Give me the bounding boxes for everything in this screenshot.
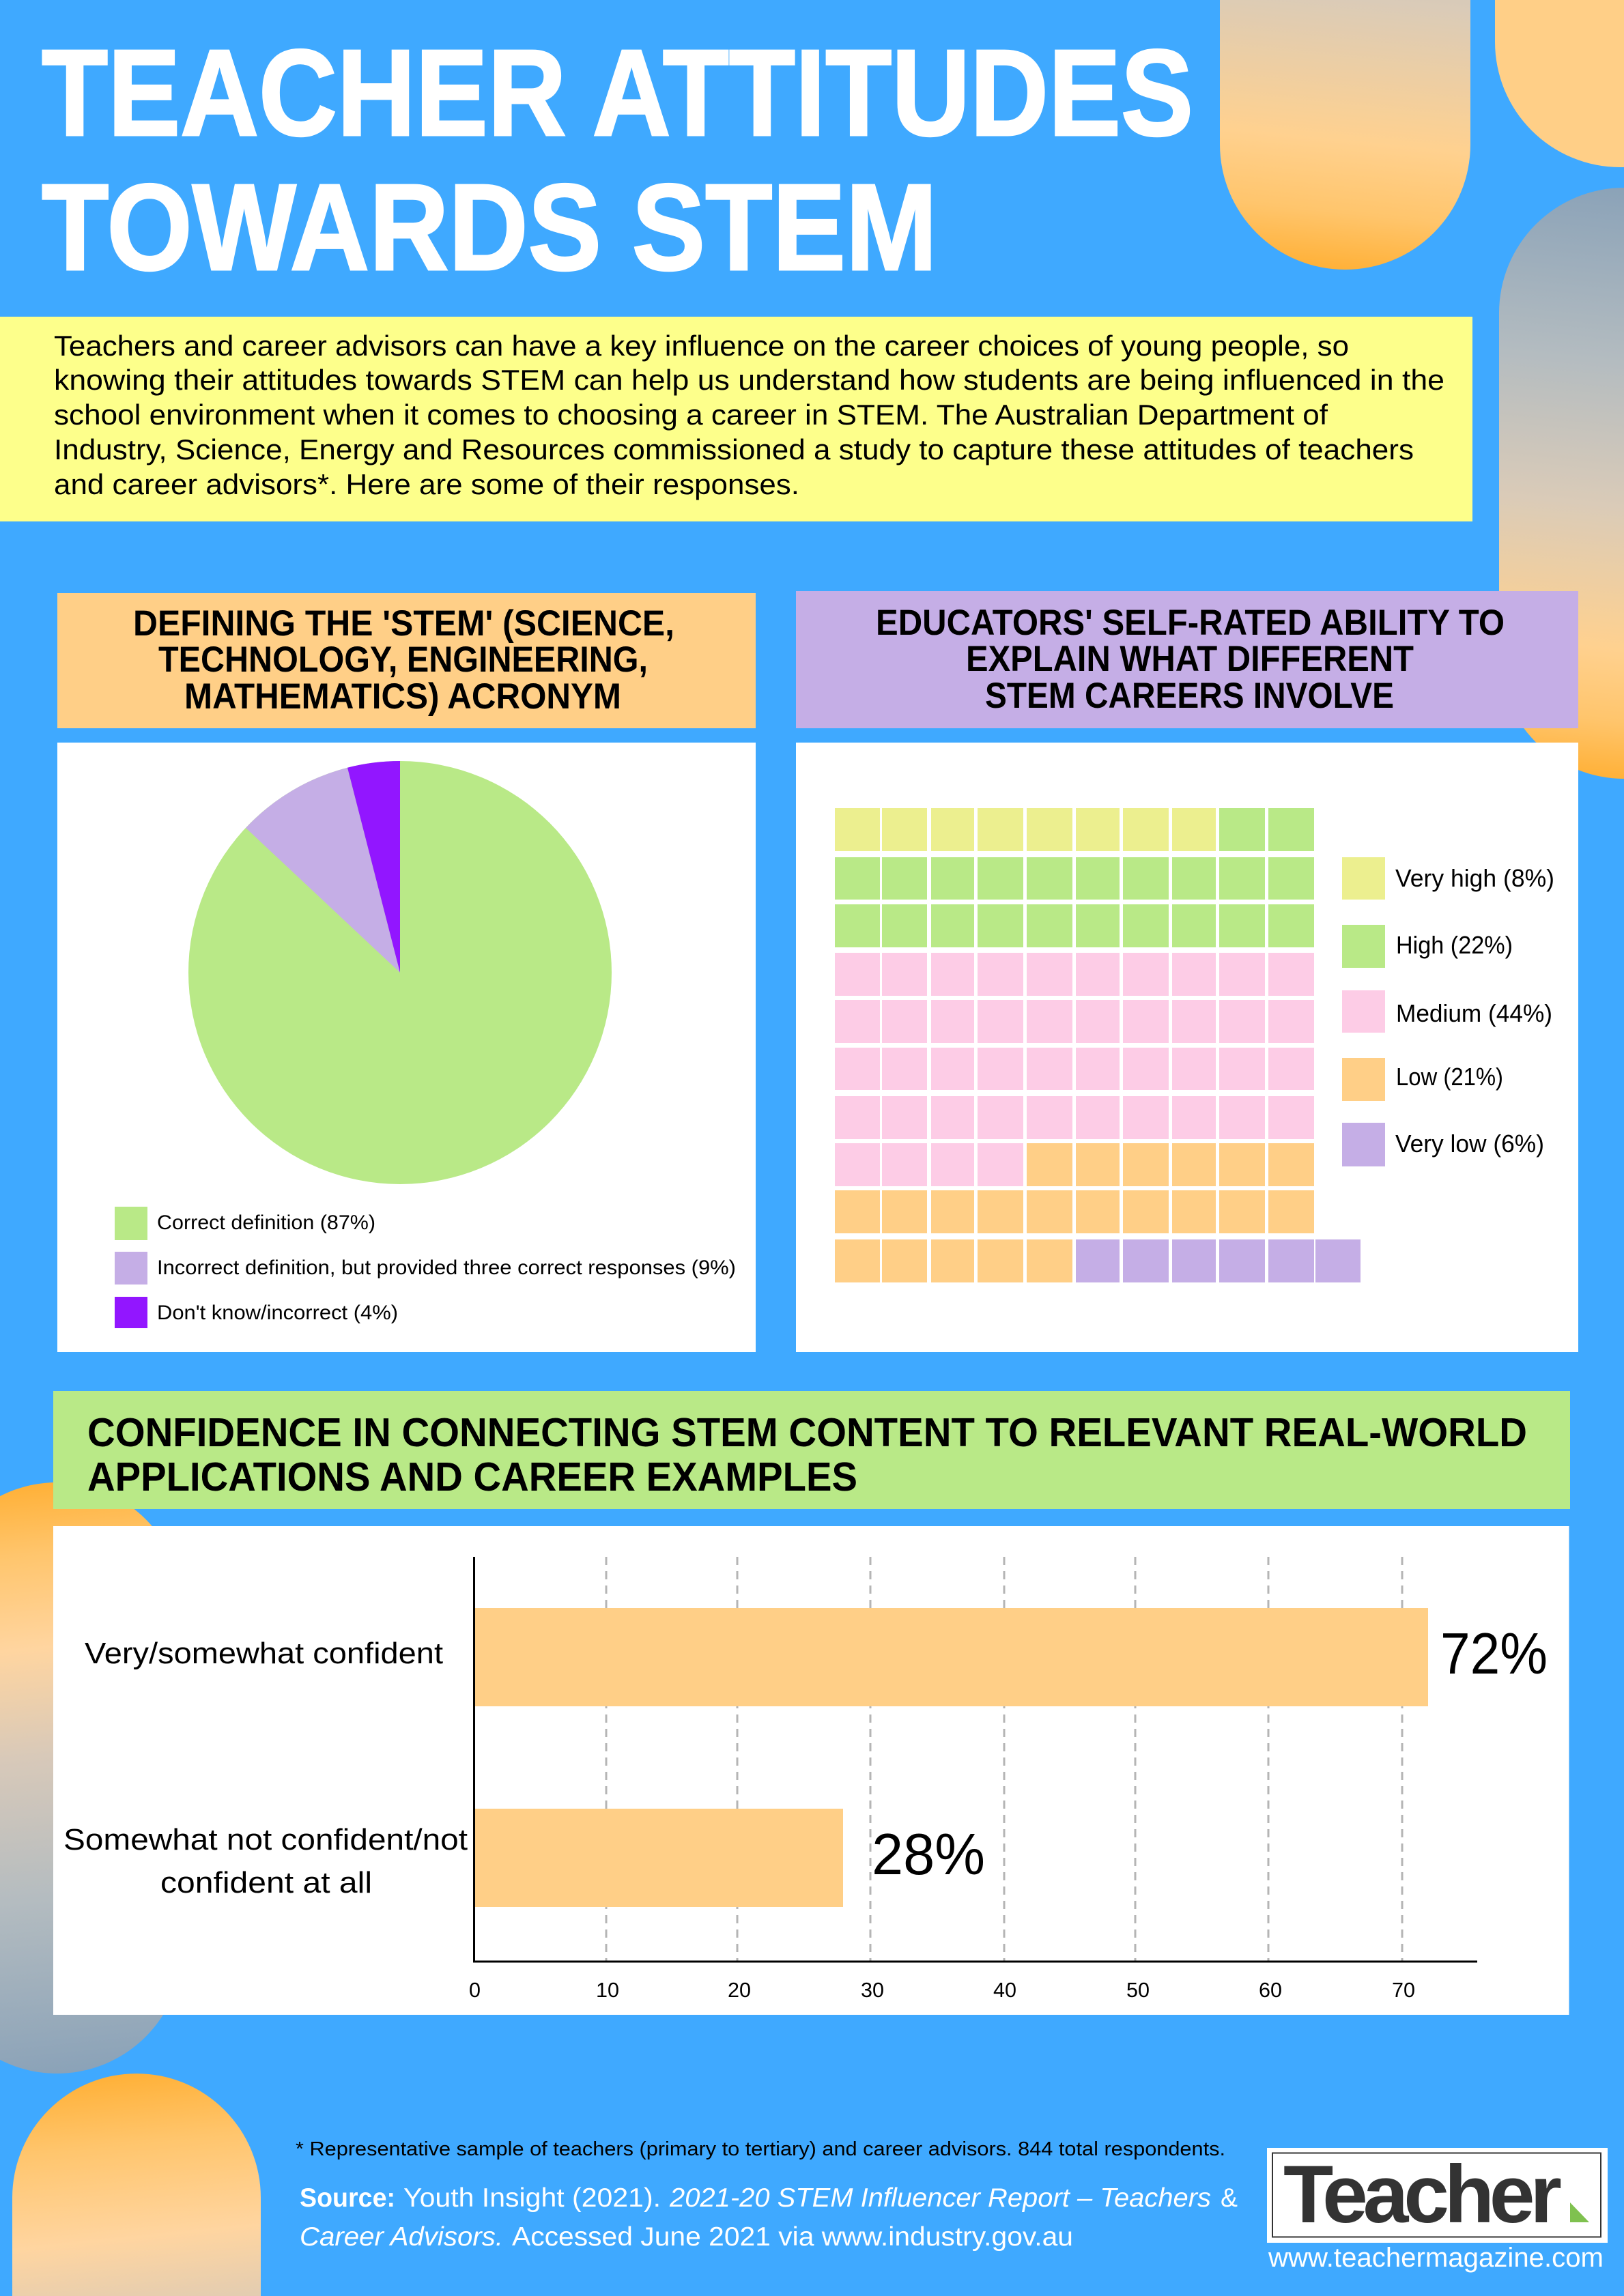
pie legend bbox=[115, 1207, 736, 1328]
axis tick labels: 50 bbox=[1126, 1978, 1150, 2002]
source citation: 2021-20 STEM Influencer Report – Teachers bbox=[669, 2183, 1211, 2213]
category labels: confident at all bbox=[160, 1866, 372, 1899]
grid lines bbox=[606, 1557, 1402, 1961]
decorative capsule top centre bbox=[1220, 0, 1470, 270]
decorative capsule left bbox=[0, 1482, 182, 2073]
intro text bbox=[54, 330, 1444, 500]
intro text: Teachers and career advisors can have a key influence on the career choices of young people, so bbox=[54, 330, 1349, 362]
category labels bbox=[63, 1637, 468, 1899]
axis tick labels: 40 bbox=[993, 1978, 1016, 2002]
axis tick labels: 20 bbox=[728, 1978, 751, 2002]
source citation: & bbox=[1221, 2183, 1238, 2213]
footnote: * Representative sample of teachers (primary to tertiary) and career advisors. 844 total respondents. bbox=[296, 2138, 1225, 2160]
panel: self-rated ability heading: STEM CAREERS INVOLVE bbox=[985, 676, 1394, 716]
axis tick labels: 60 bbox=[1259, 1978, 1282, 2002]
panel: STEM acronym heading: DEFINING THE 'STEM' (SCIENCE, bbox=[133, 603, 674, 644]
source citation: Career Advisors. bbox=[300, 2222, 503, 2252]
intro text: knowing their attitudes towards STEM can help us understand how students are being influenced in the bbox=[54, 364, 1444, 396]
panel: self-rated ability waffle chart bbox=[796, 743, 1578, 1352]
panel: confidence heading: CONFIDENCE IN CONNECTING STEM CONTENT TO RELEVANT REAL-WORLD bbox=[87, 1410, 1527, 1455]
pie legend: Correct definition (87%) bbox=[157, 1211, 375, 1234]
axis tick labels: 70 bbox=[1392, 1978, 1415, 2002]
waffle legend: Very low (6%) bbox=[1395, 1130, 1544, 1158]
category labels: Very/somewhat confident bbox=[85, 1637, 443, 1670]
icon: logo triangle bbox=[1570, 2202, 1589, 2222]
logo: Teacher magazine: Teacher bbox=[1283, 2149, 1562, 2240]
category labels: Somewhat not confident/not bbox=[63, 1823, 468, 1856]
source citation: Youth Insight (2021). bbox=[403, 2183, 661, 2213]
intro text: and career advisors*. Here are some of their responses. bbox=[54, 468, 799, 500]
intro text: school environment when it comes to choosing a career in STEM. The Australian Department of bbox=[54, 399, 1328, 431]
source citation bbox=[300, 2183, 1238, 2252]
waffle legend bbox=[1342, 857, 1554, 1166]
value label 72%: 72% bbox=[1440, 1622, 1548, 1687]
pie legend: Incorrect definition, but provided three correct responses (9%) bbox=[157, 1257, 736, 1279]
panel: STEM acronym pie chart bbox=[57, 743, 756, 1352]
axis tick labels bbox=[469, 1978, 1415, 2002]
value label 28%: 28% bbox=[872, 1822, 985, 1887]
decorative capsule top right bbox=[1495, 0, 1624, 167]
panel: confidence heading bbox=[53, 1391, 1570, 1509]
waffle legend: Low (21%) bbox=[1396, 1063, 1503, 1091]
title: TOWARDS STEM bbox=[42, 159, 937, 296]
panel: self-rated ability heading bbox=[796, 591, 1578, 728]
waffle legend: Medium (44%) bbox=[1396, 999, 1552, 1027]
panel: self-rated ability heading: EXPLAIN WHAT DIFFERENT bbox=[966, 639, 1414, 679]
waffle legend: High (22%) bbox=[1396, 931, 1513, 959]
panel: introduction bbox=[0, 317, 1472, 521]
panel: STEM acronym heading: MATHEMATICS) ACRONYM bbox=[184, 676, 621, 717]
title: TEACHER ATTITUDES bbox=[42, 25, 1193, 162]
panel: STEM acronym heading bbox=[57, 593, 756, 728]
panel: confidence bar chart bbox=[53, 1526, 1569, 2015]
panel: confidence heading: APPLICATIONS AND CAREER EXAMPLES bbox=[87, 1454, 857, 1499]
axis tick labels: 30 bbox=[861, 1978, 884, 2002]
axis tick labels: 0 bbox=[469, 1978, 481, 2002]
source citation: Source: bbox=[300, 2183, 395, 2213]
bar: very or somewhat confident bbox=[474, 1608, 1428, 1706]
panel: STEM acronym heading: TECHNOLOGY, ENGINEERING, bbox=[158, 640, 648, 680]
axis tick labels: 10 bbox=[596, 1978, 619, 2002]
source citation: Accessed June 2021 via www.industry.gov.au bbox=[512, 2222, 1073, 2252]
pie chart bbox=[188, 761, 612, 1184]
axes bbox=[474, 1557, 1477, 1962]
decorative capsule right bbox=[1499, 188, 1624, 779]
website address: www.teachermagazine.com bbox=[1268, 2243, 1604, 2273]
intro text: Industry, Science, Energy and Resources commissioned a study to capture these attitudes of teachers bbox=[54, 433, 1414, 465]
bar: not confident bbox=[474, 1809, 843, 1907]
title bbox=[42, 25, 1193, 296]
waffle chart bbox=[835, 808, 1361, 1282]
pie legend: Don't know/incorrect (4%) bbox=[157, 1302, 398, 1324]
decorative capsule bottom left bbox=[12, 2073, 261, 2296]
panel: self-rated ability heading: EDUCATORS' SELF-RATED ABILITY TO bbox=[876, 603, 1505, 643]
waffle legend: Very high (8%) bbox=[1395, 864, 1554, 892]
